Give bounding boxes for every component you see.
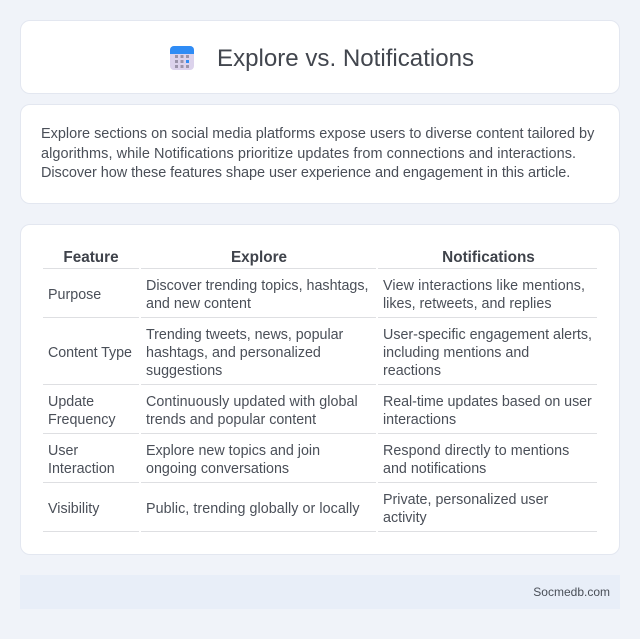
comparison table card bbox=[20, 224, 620, 555]
row: Content Type: hashtags, and personalized bbox=[146, 345, 321, 361]
intro paragraph bbox=[41, 126, 594, 181]
table header: Explore bbox=[231, 249, 287, 266]
row: Visibility bbox=[48, 492, 548, 526]
row: User Interaction: Interaction bbox=[48, 461, 115, 477]
table header: Notifications bbox=[442, 249, 535, 266]
row: User Interaction: Explore new topics and join bbox=[146, 443, 320, 459]
row: User Interaction: ongoing conversations bbox=[146, 461, 289, 477]
row: Purpose: likes, retweets, and replies bbox=[383, 296, 551, 312]
footer source text: Socmedb.com bbox=[533, 585, 610, 599]
row: Visibility: Private, personalized user bbox=[383, 492, 548, 508]
row: Visibility: Visibility bbox=[48, 501, 99, 517]
row: User Interaction: User bbox=[48, 443, 78, 459]
row: Purpose: and new content bbox=[146, 296, 251, 312]
row: Purpose: Discover trending topics, hashtags, bbox=[146, 278, 369, 294]
row: Purpose bbox=[48, 278, 585, 312]
table header: Feature bbox=[63, 249, 119, 266]
row: Purpose: Purpose bbox=[48, 287, 101, 303]
heading: Explore vs. Notifications bbox=[217, 45, 474, 72]
row: Update Frequency: trends and popular content bbox=[146, 412, 316, 428]
row: User Interaction: and notifications bbox=[383, 461, 486, 477]
intro paragraph: algorithms, while Notifications prioritize updates from connections and interactions. bbox=[41, 146, 576, 162]
row: Content Type: including mentions and bbox=[383, 345, 529, 361]
row: Purpose: View interactions like mentions, bbox=[383, 278, 585, 294]
row: User Interaction: Respond directly to mentions bbox=[383, 443, 569, 459]
footer bar bbox=[20, 575, 620, 609]
row: Update Frequency bbox=[48, 394, 592, 428]
title card bbox=[20, 20, 620, 94]
icon: calendar bbox=[170, 46, 194, 70]
row: Visibility: Public, trending globally or locally bbox=[146, 501, 360, 517]
row: Update Frequency: Update bbox=[48, 394, 94, 410]
row: Update Frequency: Real-time updates based on user bbox=[383, 394, 592, 410]
row: Update Frequency: Frequency bbox=[48, 412, 116, 428]
row: Content Type: suggestions bbox=[146, 363, 222, 379]
intro paragraph: Explore sections on social media platforms expose users to diverse content tailored by bbox=[41, 126, 594, 142]
row: User Interaction bbox=[48, 443, 569, 477]
row: Content Type: Trending tweets, news, popular bbox=[146, 327, 343, 343]
row: Content Type bbox=[48, 327, 592, 379]
intro paragraph: Discover how these features shape user experience and engagement in this article. bbox=[41, 165, 570, 181]
table header bbox=[63, 249, 535, 266]
intro text card bbox=[20, 104, 620, 204]
row: Content Type: Content Type bbox=[48, 345, 132, 361]
row: Visibility: activity bbox=[383, 510, 427, 526]
row: Content Type: User-specific engagement alerts, bbox=[383, 327, 592, 343]
row: Content Type: reactions bbox=[383, 363, 441, 379]
row: Update Frequency: interactions bbox=[383, 412, 456, 428]
row: Update Frequency: Continuously updated with global bbox=[146, 394, 358, 410]
